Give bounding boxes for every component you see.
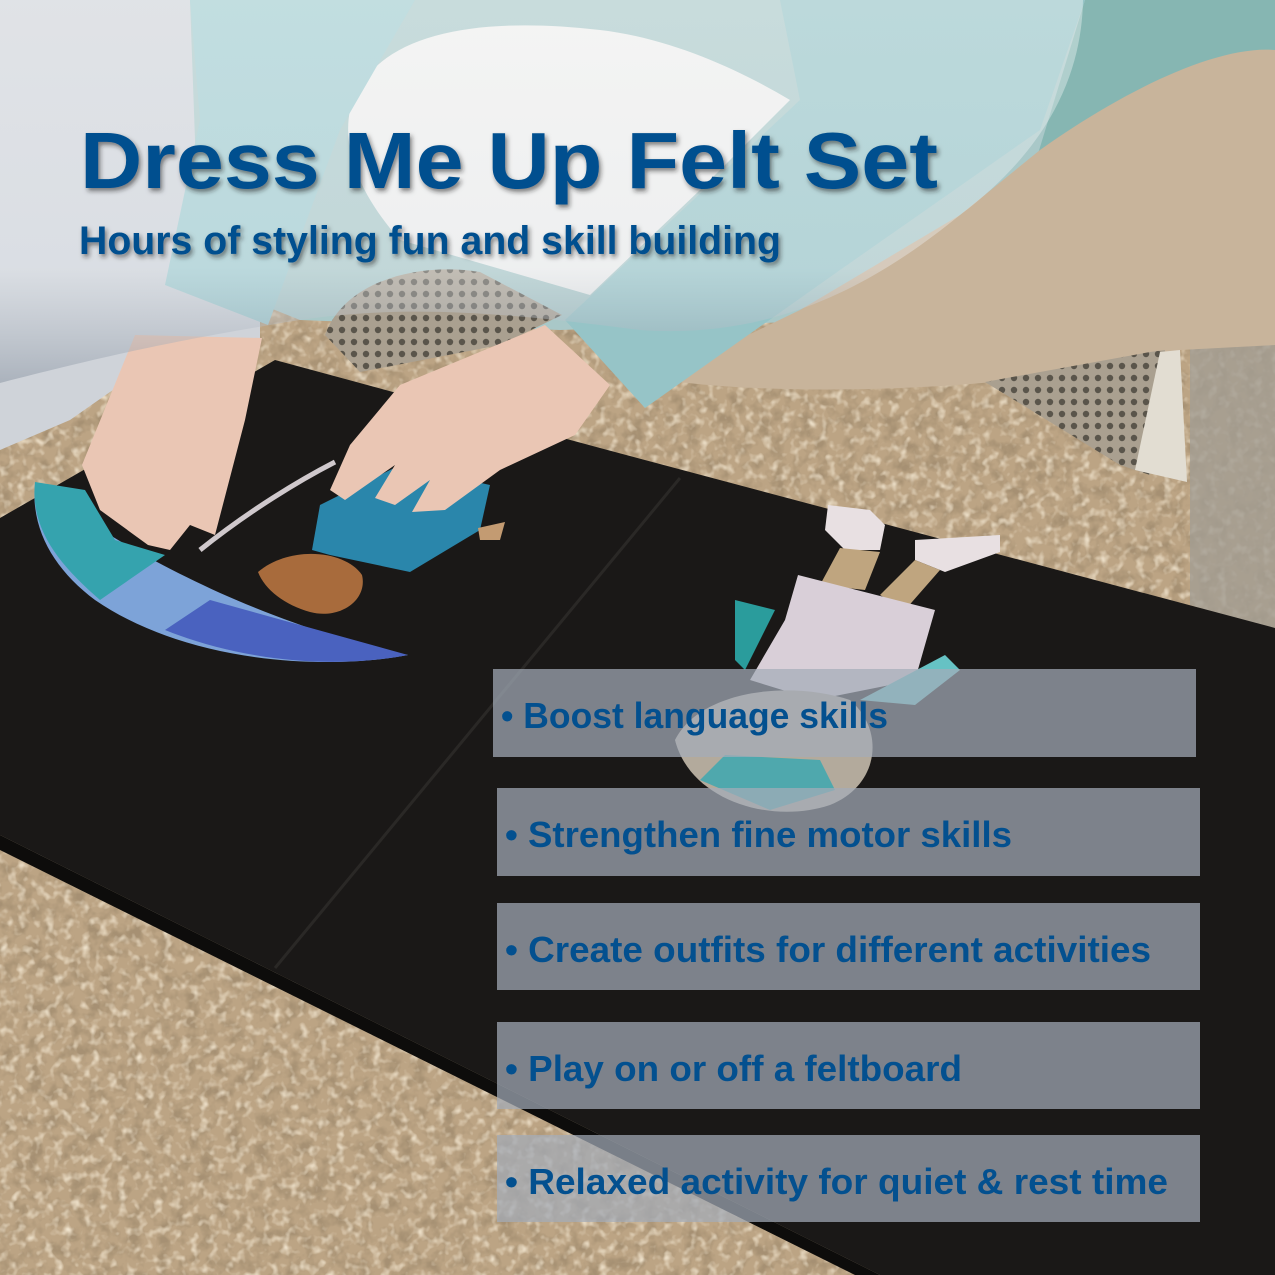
benefit: fine motor skills: • Strengthen fine motor skills	[505, 814, 1012, 855]
wall	[0, 0, 260, 450]
benefit: create outfits	[497, 903, 1200, 990]
beige leg	[680, 50, 1275, 390]
benefit: boost language skills	[493, 669, 1196, 757]
gold shoe right	[985, 350, 1165, 475]
white trousers knee	[348, 25, 790, 295]
benefit: relaxed activity	[497, 1135, 1200, 1222]
benefit: boost language skills: • Boost language skills	[501, 695, 888, 736]
benefit: fine motor skills	[497, 788, 1200, 876]
benefit: play on or off a feltboard	[497, 1022, 1200, 1109]
benefit: relaxed activity: • Relaxed activity for quiet & rest time	[505, 1161, 1168, 1202]
title: Dress Me Up Felt Set	[80, 116, 938, 205]
wall and child photo	[0, 0, 1275, 482]
translucent header swoosh	[0, 0, 1083, 383]
upper shirt back	[1030, 0, 1275, 180]
subtitle: Hours of styling fun and skill building	[79, 219, 781, 263]
shirt sleeve left	[165, 0, 415, 325]
black felt board	[0, 360, 1275, 1275]
child's hands	[82, 325, 610, 550]
silver shoe	[325, 269, 562, 372]
benefit: play on or off a feltboard: • Play on or off a feltboard	[505, 1048, 962, 1089]
felt doll in floral dress	[675, 505, 1000, 812]
benefit: create outfits: • Create outfits for different activities	[505, 929, 1151, 970]
shirt sleeve right	[565, 0, 1085, 408]
felt doll in blue dress	[34, 462, 505, 662]
torso backdrop	[190, 0, 1090, 330]
